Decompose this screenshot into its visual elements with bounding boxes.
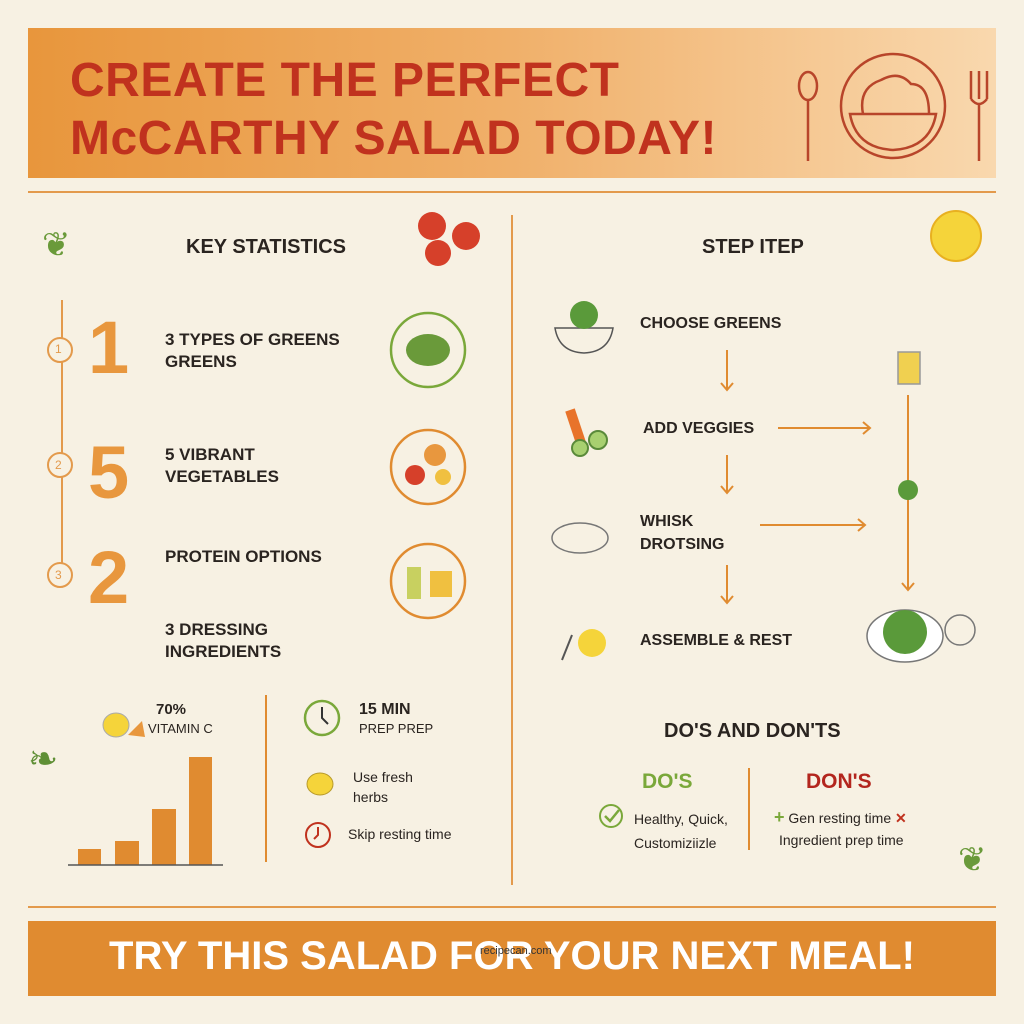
- vitamin C stat: 70%: [156, 701, 186, 718]
- donts column: DON'S: [806, 770, 872, 793]
- steps flow: ADD VEGGIES: [643, 420, 754, 437]
- footer banner: TRY THIS SALAD FOR YOUR NEXT MEAL!: [109, 934, 915, 978]
- steps flow: DROTSING: [640, 536, 724, 553]
- dos column: Customiziizle: [634, 835, 716, 851]
- heading: key statistics: KEY STATISTICS: [186, 236, 346, 258]
- footer banner: recipecan.com: [480, 945, 552, 957]
- tip: skip resting: [305, 822, 451, 848]
- icon: tomatoes: [418, 212, 480, 266]
- bar chart: [68, 757, 223, 866]
- donts column: + Gen resting time ✕: [774, 807, 907, 827]
- tip: fresh herbs: [306, 769, 413, 805]
- stat 2: [88, 431, 279, 514]
- dos column: Healthy, Quick,: [634, 811, 728, 827]
- heading: dos and donts: DO'S AND DON'TS: [664, 720, 841, 742]
- donts column: Ingredient prep time: [779, 832, 904, 848]
- dos column: DO'S: [642, 770, 693, 793]
- title: [70, 54, 717, 165]
- stat 3: 3 DRESSING: [165, 620, 268, 639]
- stat 1: [88, 306, 340, 389]
- prep time: [304, 700, 433, 736]
- title: McCARTHY SALAD TODAY!: [70, 112, 717, 165]
- steps flow: CHOOSE GREENS: [640, 315, 781, 332]
- icon: leaf: ❧: [28, 738, 58, 779]
- steps flow: ASSEMBLE & REST: [640, 632, 792, 649]
- donts column: [774, 770, 907, 848]
- footer banner: [28, 921, 996, 996]
- steps flow: [551, 301, 976, 663]
- dos column: [599, 770, 728, 851]
- vitamin C stat: VITAMIN C: [148, 721, 213, 736]
- stat 3: PROTEIN OPTIONS: [165, 547, 322, 566]
- icon circles: [390, 312, 466, 620]
- stat 1: GREENS: [165, 352, 237, 371]
- stat 2: 5 VIBRANT: [165, 445, 255, 464]
- icon: parsley: ❦: [958, 841, 986, 879]
- stat 3: INGREDIENTS: [165, 642, 281, 661]
- prep time: 15 MIN: [359, 701, 411, 718]
- stat 1: 1: [88, 306, 129, 389]
- tip: fresh herbs: Use fresh: [353, 769, 413, 785]
- header banner: [28, 28, 996, 178]
- text: 1: [55, 342, 62, 356]
- stat 3: [88, 536, 322, 661]
- text: 2: [55, 458, 62, 472]
- timeline: [47, 300, 73, 588]
- icon: herb: ❦: [42, 226, 70, 264]
- stat 3: 2: [88, 536, 129, 619]
- icon: bowl with utensils: [798, 52, 988, 161]
- title: CREATE THE PERFECT: [70, 54, 619, 107]
- tip: fresh herbs: herbs: [353, 789, 388, 805]
- tip: skip resting: Skip resting time: [348, 826, 451, 842]
- vitamin C stat: [102, 701, 213, 738]
- stat 2: 5: [88, 431, 129, 514]
- text: 3: [55, 568, 62, 582]
- stat 1: 3 TYPES OF GREENS: [165, 330, 340, 349]
- prep time: PREP PREP: [359, 721, 433, 736]
- stat 2: VEGETABLES: [165, 467, 279, 486]
- steps flow: WHISK: [640, 513, 693, 530]
- icon: lemon: [930, 210, 982, 262]
- heading: steps: STEP ITEP: [702, 236, 804, 258]
